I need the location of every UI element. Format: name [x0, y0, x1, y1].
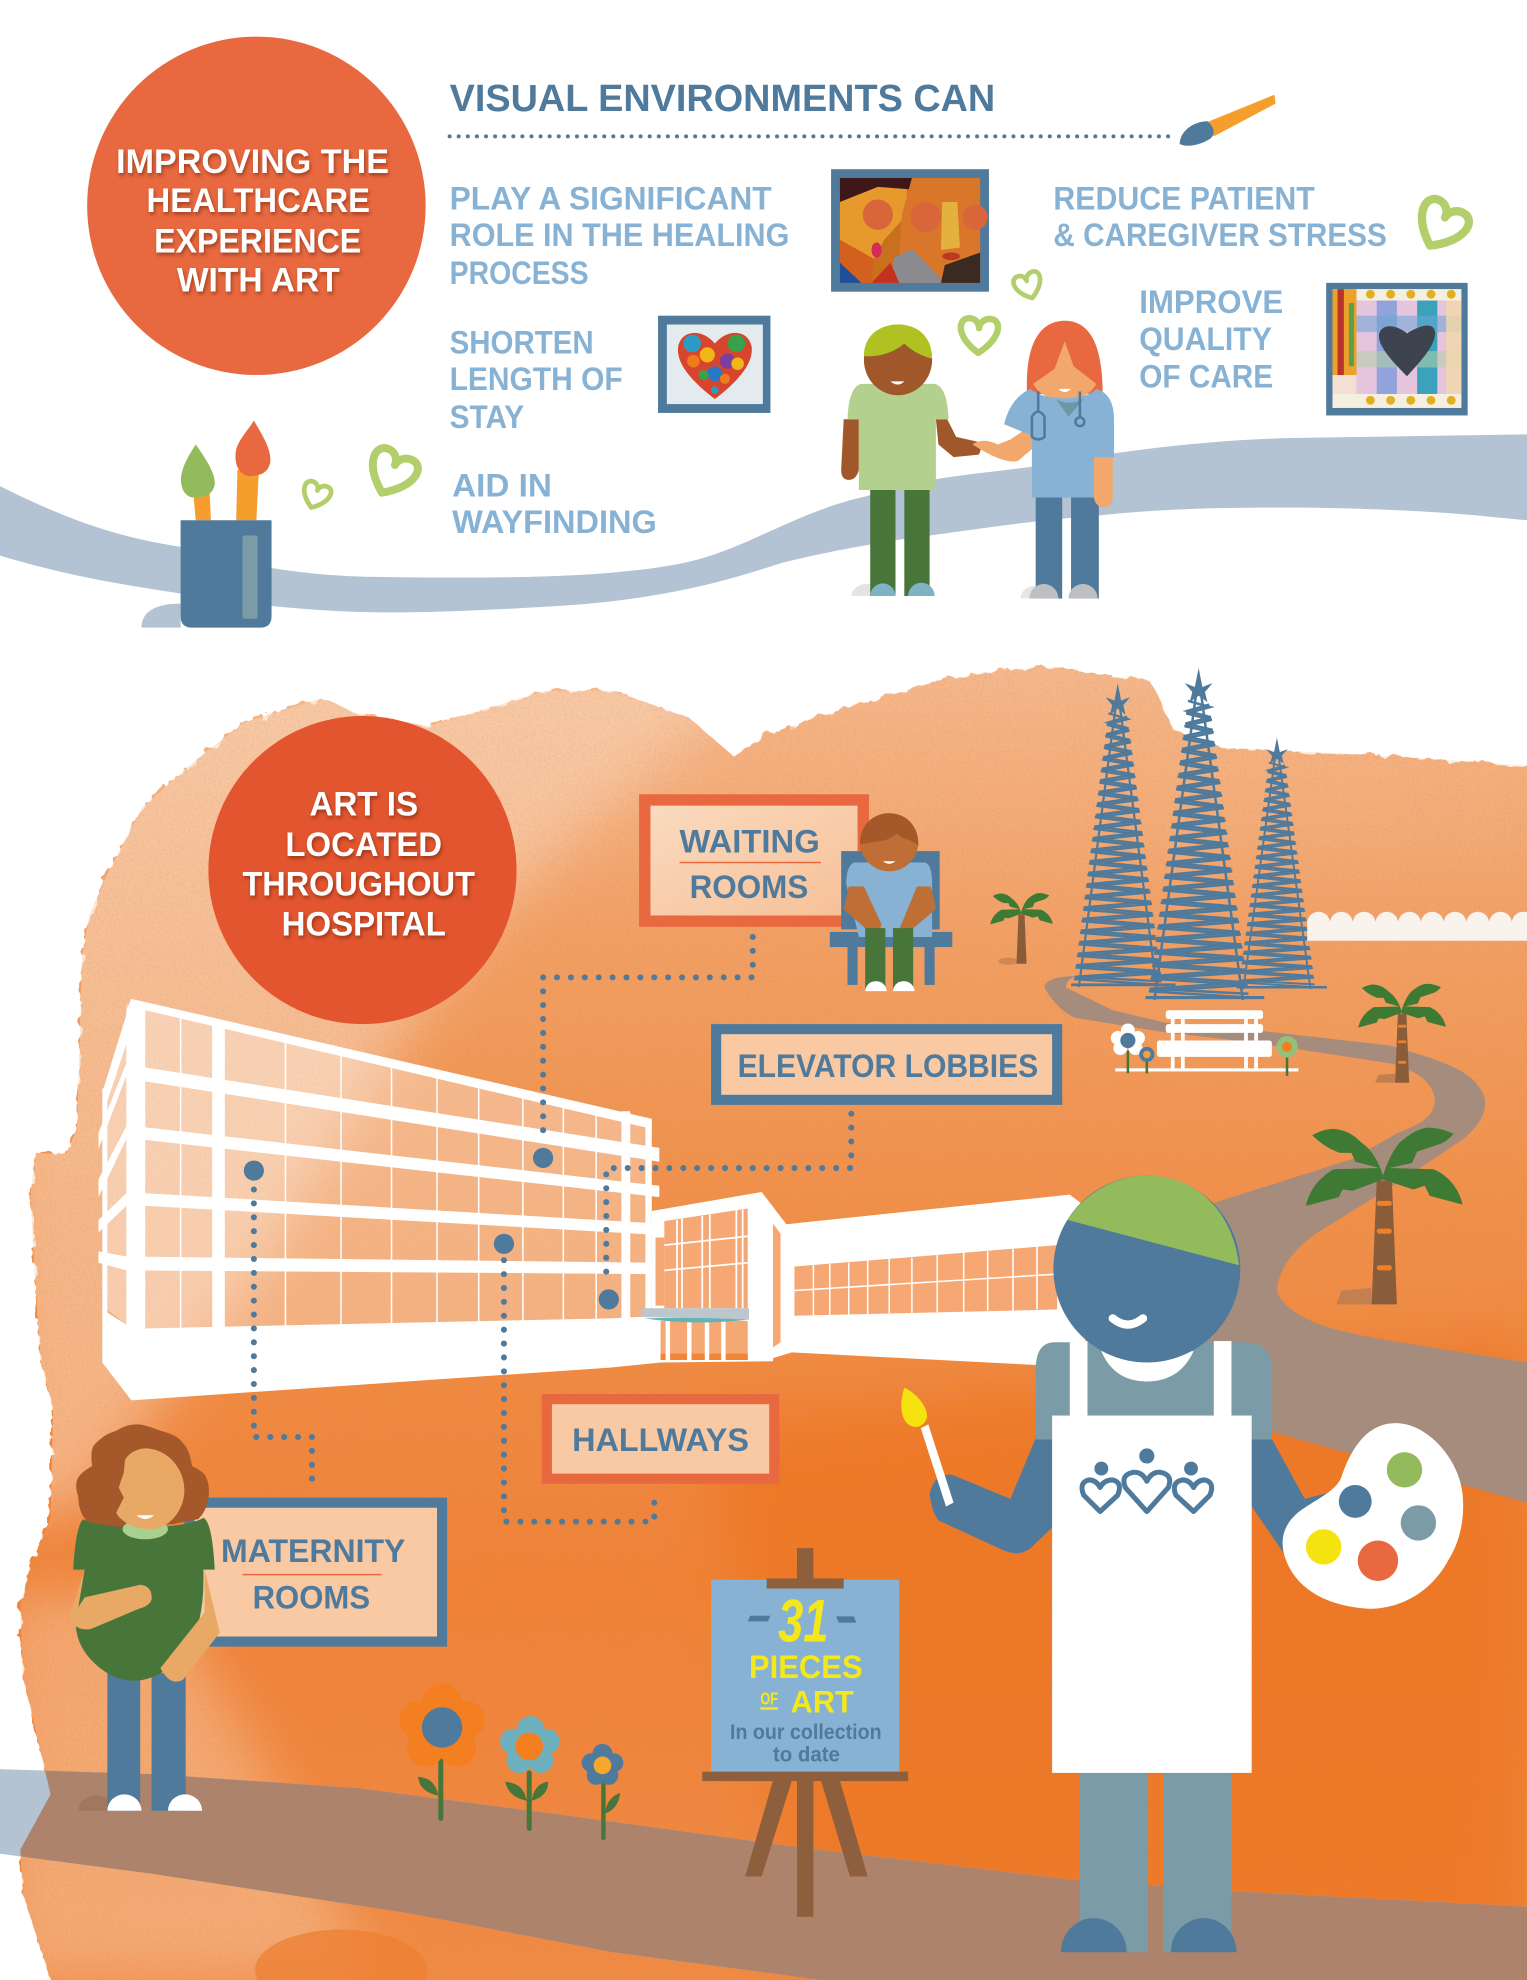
easel sign: 31 pieces of art: 31	[778, 1587, 829, 1655]
benefit: healing process	[450, 181, 789, 291]
label: maternity rooms: ROOMS	[253, 1579, 370, 1616]
title text: IMPROVING THE	[116, 143, 389, 181]
title text: HEALTHCARE	[147, 182, 370, 220]
benefit: shorten stay: STAY	[450, 399, 524, 435]
wash tonal layers	[0, 657, 1527, 1980]
circle text: THROUGHOUT	[243, 865, 475, 903]
connector dotted lines	[254, 937, 851, 1522]
label: elevator lobbies: ELEVATOR LOBBIES	[738, 1047, 1038, 1084]
bench with flowers	[1111, 1010, 1298, 1076]
location dots	[244, 1148, 619, 1309]
title text	[116, 143, 389, 300]
figure: seated person	[830, 813, 952, 991]
benefit: healing process: ROLE IN THE HEALING	[450, 217, 789, 253]
hospital building	[99, 999, 1086, 1400]
figure: artist	[901, 1176, 1463, 1952]
tree sculptures	[1071, 668, 1327, 1000]
easel sign: 31 pieces of art: to date	[773, 1743, 840, 1767]
benefit: quality of care: IMPROVE	[1139, 284, 1283, 320]
benefit: reduce stress	[1053, 181, 1387, 253]
benefit: wayfinding	[452, 467, 657, 540]
watercolor wash background	[20, 665, 1527, 1980]
entrance block	[652, 1192, 787, 1363]
fence	[1307, 912, 1527, 941]
benefit: healing process: PLAY A SIGNIFICANT	[450, 181, 772, 217]
benefit: quality of care: OF CARE	[1139, 359, 1273, 395]
side wing glazing	[107, 1029, 126, 1325]
arms	[930, 1432, 1055, 1553]
thin mullions	[181, 1017, 596, 1328]
label: waiting rooms: ROOMS	[690, 868, 808, 905]
ground band lower	[0, 1769, 1527, 1980]
right wing	[763, 1195, 1086, 1370]
framed painting: quilt heart	[1326, 283, 1468, 415]
apron	[1070, 1341, 1087, 1419]
icon: paintbrush	[1180, 95, 1276, 146]
title circle	[87, 37, 426, 375]
top band: wavy grey-blue road	[0, 434, 1527, 612]
benefit: shorten stay	[450, 325, 623, 435]
easel	[745, 1548, 868, 1917]
floor slabs	[99, 999, 659, 1333]
figure: patient	[841, 325, 981, 596]
easel sign: 31 pieces of art	[702, 1548, 908, 1917]
label: maternity rooms: MATERNITY	[221, 1532, 406, 1569]
easel sign: 31 pieces of art: PIECES	[749, 1648, 863, 1685]
benefit: healing process: PROCESS	[450, 255, 589, 291]
label: elevator lobbies	[716, 1029, 1057, 1100]
framed painting: heart of hands	[658, 316, 770, 413]
benefit: reduce stress: & CAREGIVER STRESS	[1053, 217, 1387, 253]
apron logo	[1082, 1448, 1212, 1512]
legs	[1080, 1768, 1148, 1952]
label: waiting rooms	[645, 800, 863, 921]
figure: nurse	[973, 321, 1114, 599]
title text: WITH ART	[177, 262, 340, 300]
dotted heading rule	[450, 135, 1175, 138]
sign text	[748, 1616, 770, 1621]
winding garden path	[1045, 976, 1527, 1503]
label: hallways	[547, 1399, 774, 1479]
flowers	[399, 1683, 623, 1840]
benefit: shorten stay: SHORTEN	[450, 325, 594, 361]
palm tree small	[990, 893, 1053, 965]
easel sign: 31 pieces of art: In our collection	[730, 1720, 882, 1744]
label: maternity rooms	[189, 1503, 442, 1642]
palm tree medium	[1358, 984, 1446, 1083]
title text: EXPERIENCE	[154, 223, 361, 261]
figure: pregnant woman	[69, 1424, 220, 1811]
icon: cup of brushes	[141, 420, 272, 628]
canopy	[642, 1308, 749, 1320]
palette	[1283, 1423, 1463, 1609]
benefit: shorten stay: LENGTH OF	[450, 361, 623, 397]
circle text: ART IS	[309, 786, 418, 824]
benefit: quality of care	[1139, 284, 1283, 395]
icon: green hearts	[299, 195, 1472, 512]
paintbrush	[921, 1424, 954, 1506]
head	[1053, 1176, 1240, 1363]
circle: art is located	[208, 716, 517, 1024]
benefit: quality of care: QUALITY	[1139, 321, 1272, 357]
benefit: wayfinding: AID IN	[452, 467, 552, 503]
label: hallways: HALLWAYS	[572, 1421, 749, 1458]
easel sign: 31 pieces of art: ART	[791, 1683, 854, 1719]
white base	[102, 1309, 661, 1400]
benefit: wayfinding: WAYFINDING	[452, 504, 657, 540]
label: waiting rooms: WAITING	[680, 822, 820, 859]
circle text	[243, 786, 475, 944]
shirt	[1036, 1342, 1272, 1440]
heading: visual environments can: VISUAL ENVIRONMENTS CAN	[450, 78, 995, 120]
framed painting: two faces	[831, 169, 989, 292]
circle text: HOSPITAL	[282, 906, 446, 944]
benefit: reduce stress: REDUCE PATIENT	[1053, 181, 1315, 217]
main facade glazing	[126, 1004, 652, 1328]
palm tree large	[1306, 1128, 1463, 1304]
circle text: LOCATED	[285, 826, 442, 864]
easel sign: 31 pieces of art: OF	[760, 1689, 778, 1709]
